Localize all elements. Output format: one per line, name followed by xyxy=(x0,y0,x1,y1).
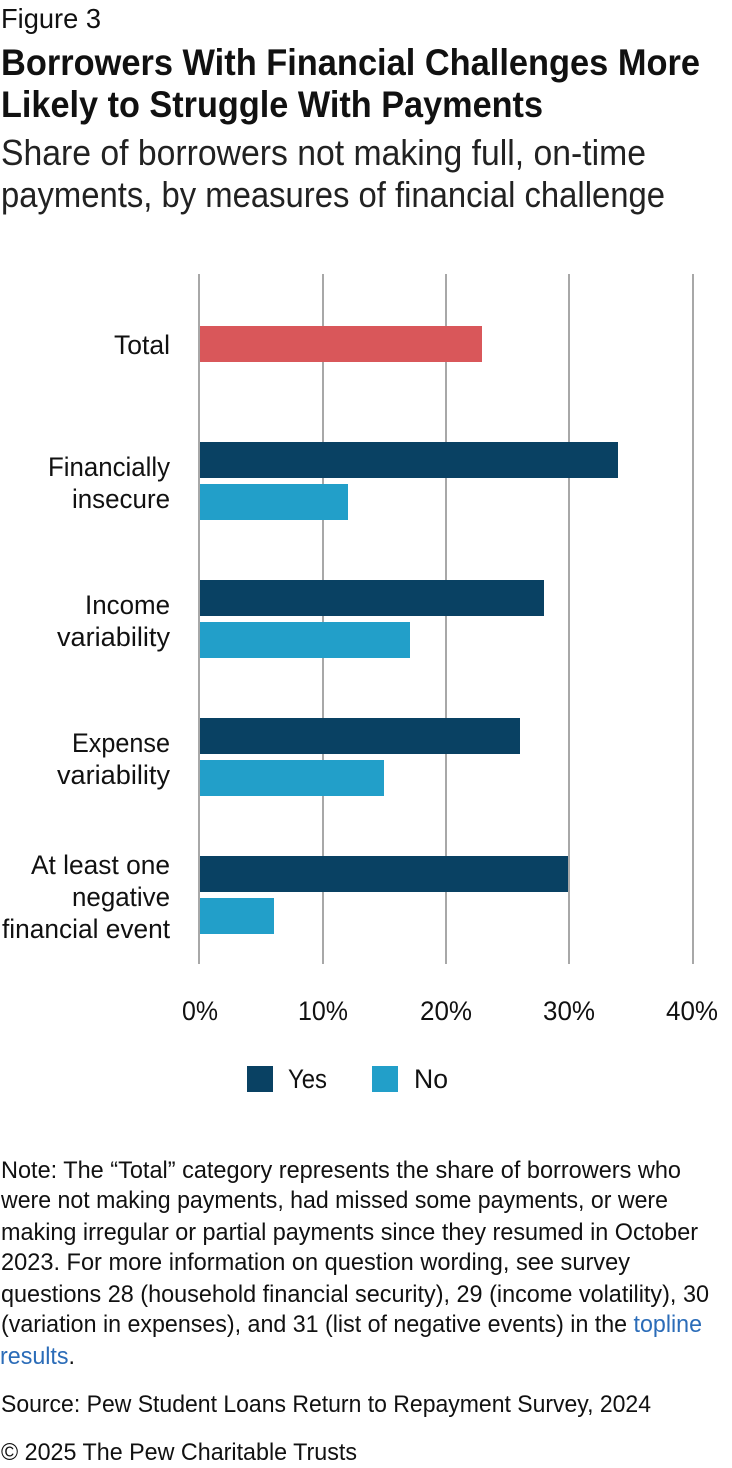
title: Borrowers With Financial Challenges More xyxy=(1,42,700,83)
legend: yes: Yes xyxy=(288,1064,327,1094)
title: Likely to Struggle With Payments xyxy=(1,84,543,125)
note: 2023. For more information on question wording, see survey xyxy=(1,1249,630,1276)
axis labels: 40% xyxy=(666,996,718,1026)
bar: total 23% xyxy=(200,326,482,362)
legend: no: No xyxy=(414,1064,448,1094)
legend: no xyxy=(372,1064,448,1094)
axis labels xyxy=(182,996,718,1026)
axis labels: 30% xyxy=(543,996,595,1026)
copyright: © 2025 The Pew Charitable Trusts xyxy=(1,1439,357,1466)
category labels: financial event xyxy=(2,914,171,944)
bars: income variability xyxy=(200,580,544,658)
bars: negative financial event xyxy=(200,856,568,934)
note: (variation in expenses), and 31 (list of negative events) in the topline xyxy=(1,1311,702,1338)
axis labels: 20% xyxy=(420,996,472,1026)
note: were not making payments, had missed some payments, or were xyxy=(0,1187,668,1214)
note: results. xyxy=(0,1343,75,1370)
subtitle: payments, by measures of financial challenge xyxy=(1,174,665,215)
bars: financially insecure xyxy=(200,442,618,520)
bars: expense variability xyxy=(200,718,520,796)
category labels: variability xyxy=(57,760,171,790)
note xyxy=(0,1157,709,1370)
legend xyxy=(247,1064,448,1094)
note: making irregular or partial payments since they resumed in October xyxy=(1,1219,698,1246)
category labels: negative xyxy=(72,882,170,912)
note: questions 28 (household financial security), 29 (income volatility), 30 xyxy=(1,1281,709,1308)
category labels: Expense xyxy=(72,728,170,758)
axis labels: 10% xyxy=(298,996,348,1026)
category labels: Financially xyxy=(48,452,171,482)
source: Source: Pew Student Loans Return to Repayment Survey, 2024 xyxy=(1,1391,651,1418)
category labels xyxy=(2,330,171,944)
title xyxy=(1,42,700,125)
figure label: Figure 3 xyxy=(1,3,101,34)
axis labels: 0% xyxy=(182,996,218,1026)
category labels: Income xyxy=(85,590,170,620)
category labels: Total xyxy=(114,330,170,360)
bar chart xyxy=(2,274,718,1026)
category labels: variability xyxy=(57,622,171,652)
grid lines xyxy=(198,274,694,964)
category labels: insecure xyxy=(72,484,170,514)
subtitle xyxy=(1,132,665,215)
note: Note: The “Total” category represents the share of borrowers who xyxy=(1,1157,681,1184)
subtitle: Share of borrowers not making full, on-time xyxy=(1,132,646,173)
category labels: At least one xyxy=(31,850,170,880)
legend: yes xyxy=(247,1064,327,1094)
